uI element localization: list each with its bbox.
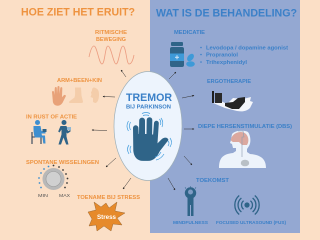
- list: medication: Levodopa / dopamine agonist: [206, 46, 288, 52]
- label: in rust of actie: IN RUST OF ACTIE: [26, 114, 78, 120]
- icon: mindfulness figure: [185, 186, 196, 216]
- icon: walking person: [58, 120, 71, 144]
- ellipse panel: tremor: [114, 72, 182, 180]
- label: spontane wisselingen: SPONTANE WISSELINGEN: [26, 160, 99, 166]
- icon: seated person: [32, 120, 46, 144]
- subtitle: BIJ PARKINSON: [126, 104, 171, 110]
- label: max: MAX: [59, 193, 70, 198]
- label: focused ultrasound: FOCUSED ULTRASOUND (FUS): [216, 220, 286, 225]
- icon: stress burst: Stress: [97, 214, 116, 221]
- icon: ultrasound waves: [235, 196, 259, 214]
- title: tremor: TREMOR: [126, 92, 172, 104]
- icon: hand, foot, chin: [52, 86, 99, 106]
- icon: medicine bottle and pills: [170, 42, 195, 67]
- icon: dial: [38, 165, 68, 190]
- label: ritmische beweging: RITMISCHE: [95, 30, 128, 36]
- arrows: left and right: [92, 70, 194, 190]
- icon: head with brain: [219, 131, 266, 168]
- label: toekomst: TOEKOMST: [196, 178, 229, 184]
- icon: trembling hand: [127, 112, 172, 161]
- icon: stress burst: [88, 202, 125, 231]
- label: toename bij stress: TOENAME BIJ STRESS: [77, 195, 141, 201]
- label: mindfulness: MINDFULNESS: [173, 220, 208, 225]
- list: medication: [200, 46, 288, 66]
- heading: left: HOE ZIET HET ERUIT?: [21, 6, 135, 18]
- label: arm been kin: ARM+BEEN+KIN: [57, 78, 102, 84]
- list: medication: Trihexphenidyl: [206, 60, 248, 66]
- label: min: MIN: [38, 193, 48, 198]
- label: ritmische beweging: BEWEGING: [96, 37, 126, 43]
- label: ritmische beweging: [95, 30, 128, 43]
- heading: right: WAT IS DE BEHANDELING?: [156, 8, 297, 20]
- icon: arm with orthosis: [212, 91, 253, 111]
- chart: sine wave: [89, 46, 134, 64]
- list: medication: Propranolol: [206, 52, 239, 58]
- label: medicatie: MEDICATIE: [174, 30, 206, 36]
- label: dbs: DIEPE HERSENSTIMULATIE (DBS): [198, 124, 292, 130]
- label: ergotherapie: ERGOTHERAPIE: [207, 79, 252, 85]
